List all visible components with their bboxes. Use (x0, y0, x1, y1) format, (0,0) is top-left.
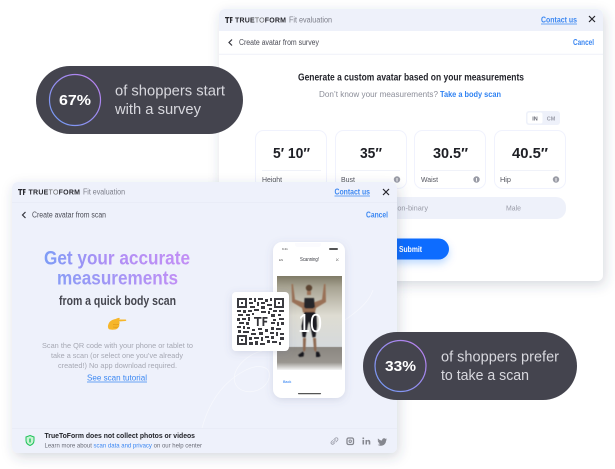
phone status bar: 9:41 (282, 247, 288, 251)
scan header subtitle: Fit evaluation (83, 188, 125, 196)
stat description: to take a scan (441, 368, 529, 384)
phone home indicator (298, 393, 321, 394)
scan subheading: from a quick body scan (59, 294, 176, 308)
survey contact link: Contact us (541, 16, 577, 24)
survey panel header bar (219, 9, 603, 31)
scan tutorial link: See scan tutorial (87, 372, 147, 382)
unit toggle: CM (547, 116, 556, 122)
submit button: Submit (399, 245, 422, 254)
survey logo: TRUETOFORM (235, 18, 286, 24)
survey close icon (589, 16, 595, 22)
gender selector: Non-binary (392, 204, 428, 212)
QR centre logo (252, 315, 270, 328)
measurement card: waist: 30.5″ (433, 146, 468, 162)
survey cancel link: Cancel (573, 38, 594, 47)
QR code modules (237, 298, 284, 345)
icon: instagram (347, 438, 354, 444)
measurement card: waist: Waist (421, 175, 439, 184)
scanning photo (277, 276, 342, 370)
progress ring (375, 340, 426, 392)
privacy footer (26, 431, 387, 450)
submit button (371, 238, 449, 260)
callout: 67% survey (36, 66, 243, 134)
scan instructions: created!) No app download required. (58, 361, 177, 370)
stat description (114, 84, 225, 118)
phone status bar (282, 243, 338, 251)
measurement card: waist (414, 130, 486, 188)
privacy title: TrueToForm does not collect photos or videos (44, 431, 195, 440)
survey subheading (319, 89, 501, 99)
gender selector (255, 197, 566, 219)
QR code card (232, 292, 289, 351)
scan back chevron (22, 212, 26, 218)
measurement card: bust: 35″ (360, 146, 382, 162)
unit toggle: IN (532, 116, 538, 122)
icon: link (331, 438, 338, 444)
scan instructions: take a scan (or select one you’ve already (51, 351, 183, 360)
stat value: 67% (59, 92, 91, 109)
privacy note: Learn more about scan data and privacy on our help center (44, 442, 203, 450)
scan heading: measurements (57, 268, 178, 290)
icon: linkedin (362, 438, 370, 445)
stat value: 33% (385, 358, 416, 375)
panel: create avatar from survey (219, 9, 603, 281)
stat description: with a survey (114, 102, 202, 118)
measurement card: height: 5′ 10″ (273, 146, 310, 162)
icon: shield (26, 436, 34, 446)
stat description: of shoppers start (115, 84, 225, 100)
phone mockup: EN (279, 258, 283, 262)
phone back link: Back (283, 380, 291, 384)
woman figure (292, 284, 326, 357)
icon: pointing hand emoji (108, 318, 126, 330)
scan subheader title: Create avatar from scan (32, 210, 106, 220)
measurement card: hip: 40.5″ (512, 146, 548, 162)
scan contact link: Contact us (334, 188, 370, 196)
stat description: of shoppers prefer (441, 350, 559, 366)
panel: create avatar from scan (12, 182, 397, 453)
measurement card: height (256, 130, 326, 188)
survey subheading: Take a body scan (440, 89, 501, 99)
measurement card: hip: Hip (500, 175, 511, 184)
scan heading (44, 248, 190, 290)
survey back chevron (229, 40, 232, 46)
survey heading: Generate a custom avatar based on your measurements (298, 72, 524, 84)
stat description (441, 350, 559, 384)
measurement card: bust (336, 130, 406, 188)
progress ring (50, 74, 100, 126)
scan instructions: Scan the QR code with your phone or tablet to (42, 341, 193, 350)
phone title: Scanning! (300, 257, 319, 263)
unit toggle (526, 111, 560, 125)
scan close icon (383, 189, 389, 195)
countdown number: 10 (298, 308, 322, 338)
scan logo: TRUETOFORM (28, 190, 80, 196)
survey subheading: Don’t know your measurements? (319, 89, 438, 99)
phone mockup (273, 242, 345, 398)
measurement card: bust: Bust (341, 175, 356, 184)
measurement card: hip (494, 130, 566, 188)
gender selector: Male (506, 204, 521, 212)
survey header subtitle: Fit evaluation (289, 16, 332, 24)
callout: 33% scan (363, 332, 577, 400)
scan instructions (42, 341, 193, 370)
scan cancel link: Cancel (366, 210, 388, 220)
icon: twitter (378, 438, 387, 446)
measurement card: height: Height (262, 175, 283, 184)
decorative swirl lines (202, 290, 373, 428)
survey subheader title: Create avatar from survey (239, 38, 319, 47)
scan heading: Get your accurate (44, 248, 190, 270)
